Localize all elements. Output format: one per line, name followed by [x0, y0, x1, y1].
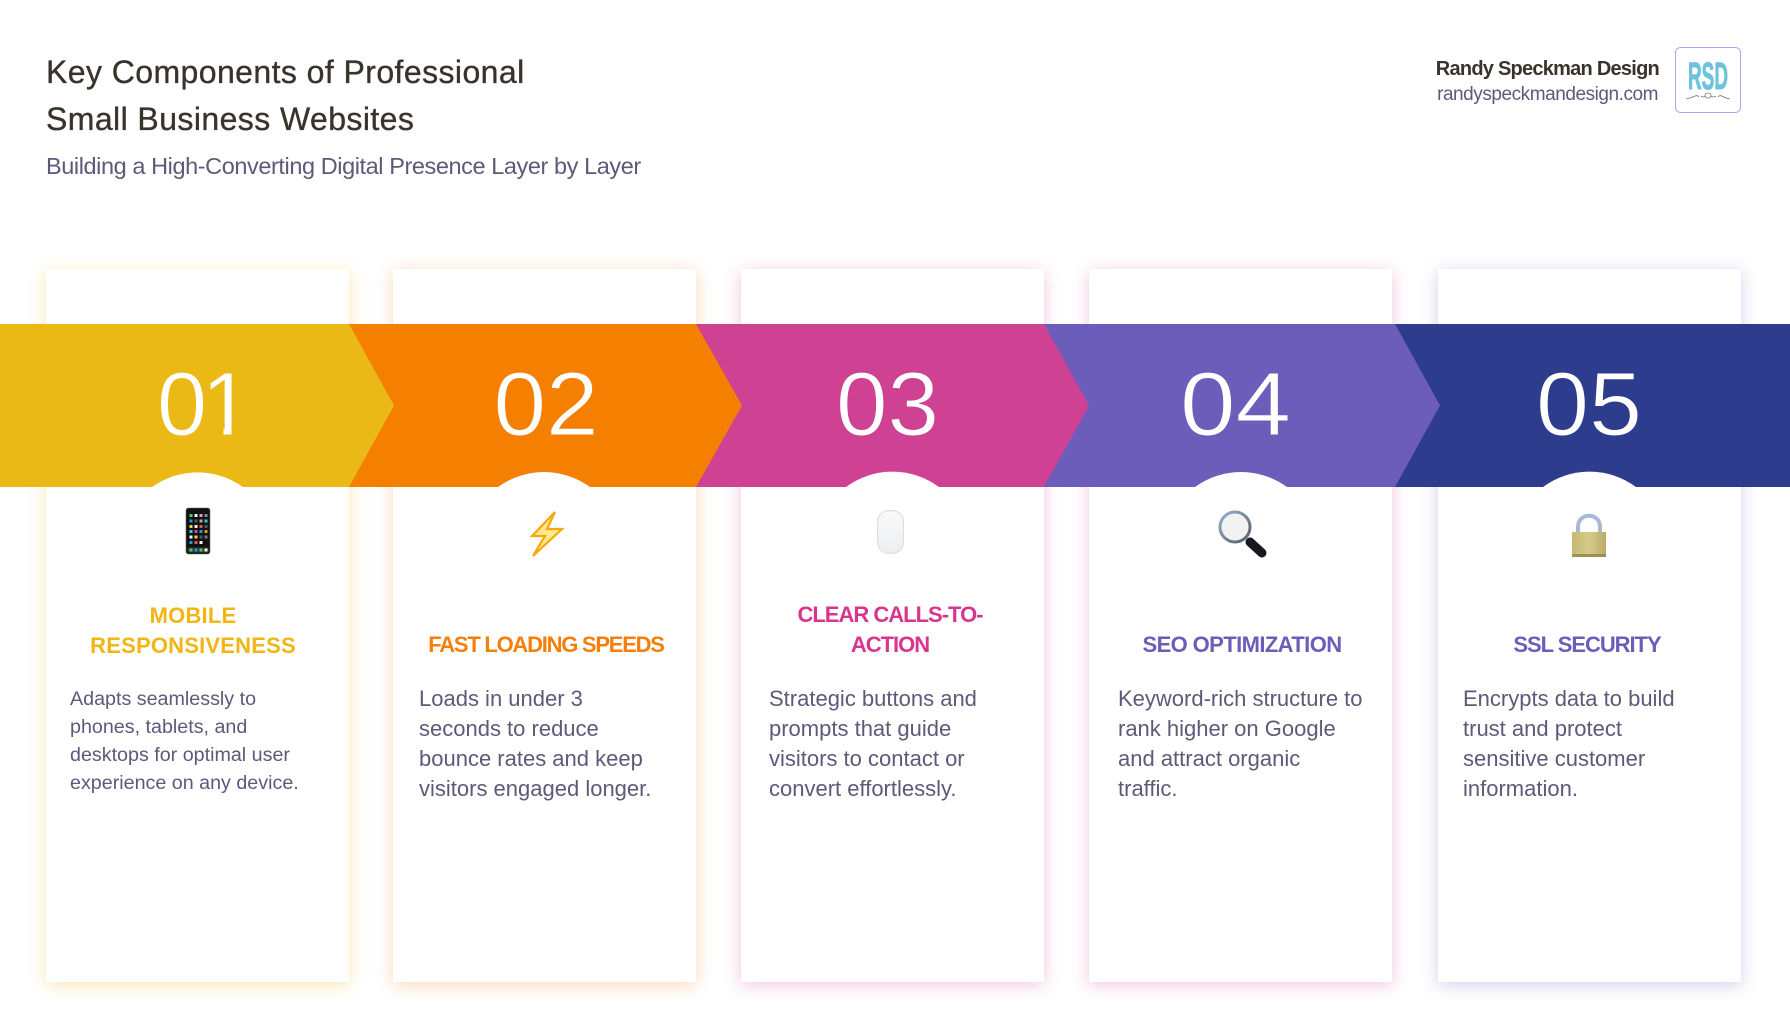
body text: [1118, 686, 1363, 801]
heading: mobile responsiveness: MOBILE: [150, 603, 236, 628]
panel: clear calls-to-action: [741, 269, 1044, 982]
body text: visitors to contact or: [769, 746, 965, 771]
heading: mobile responsiveness: RESPONSIVENESS: [90, 633, 296, 658]
body text: convert effortlessly.: [769, 776, 956, 801]
title: [46, 54, 525, 137]
panel: seo optimization: [1089, 269, 1392, 982]
body text: rank higher on Google: [1118, 716, 1336, 741]
body text: [419, 686, 651, 801]
arrow 02: 02: [494, 355, 598, 455]
body text: sensitive customer: [1463, 746, 1645, 771]
panel: fast loading speeds: [393, 269, 696, 982]
brand name: Randy Speckman Design: [1436, 58, 1659, 80]
panel: ssl security: [1438, 269, 1741, 982]
body text: prompts that guide: [769, 716, 951, 741]
icon: lightning bolt: [530, 511, 565, 557]
body text: [1463, 686, 1675, 801]
logo: [1675, 47, 1741, 113]
arrow 02: [300, 324, 742, 487]
body text: [70, 688, 299, 794]
body text: Encrypts data to build: [1463, 686, 1675, 711]
body text: bounce rates and keep: [419, 746, 643, 771]
body text: [769, 686, 977, 801]
title: Key Components of Professional: [46, 54, 525, 90]
arrow 05: [1300, 324, 1790, 487]
body text: Strategic buttons and: [769, 686, 977, 711]
heading: ssl security: SSL SECURITY: [1513, 632, 1661, 657]
body text: experience on any device.: [70, 772, 299, 794]
arrow 01: [0, 324, 394, 487]
icon: computer mouse: [877, 510, 904, 554]
body text: and attract organic: [1118, 746, 1300, 771]
arrow 05: 05: [1536, 355, 1642, 455]
heading: clear calls-to-action: [797, 602, 983, 657]
icon: mobile phone: [186, 508, 210, 554]
arrow 01: 0: [157, 355, 207, 455]
subtitle: Building a High-Converting Digital Presence Layer by Layer: [46, 153, 641, 179]
icon: padlock: [1572, 514, 1606, 557]
arrow 01: 1: [202, 355, 252, 455]
heading: fast loading speeds: FAST LOADING SPEEDS: [428, 632, 664, 657]
body text: Adapts seamlessly to: [70, 688, 256, 710]
heading: clear calls-to-action: ACTION: [851, 632, 929, 657]
title: Small Business Websites: [46, 101, 414, 137]
body text: phones, tablets, and: [70, 716, 247, 738]
body text: seconds to reduce: [419, 716, 599, 741]
heading: mobile responsiveness: [90, 603, 296, 658]
body text: Loads in under 3: [419, 686, 583, 711]
body text: Keyword-rich structure to: [1118, 686, 1363, 711]
arrow 03: [650, 324, 1089, 487]
body text: desktops for optimal user: [70, 744, 290, 766]
body text: information.: [1463, 776, 1578, 801]
arrow 03: 03: [836, 355, 939, 455]
arrow 04: [1000, 324, 1440, 487]
heading: clear calls-to-action: CLEAR CALLS-TO-: [797, 602, 983, 627]
arrow 04: 04: [1180, 355, 1291, 455]
body text: visitors engaged longer.: [419, 776, 651, 801]
body text: traffic.: [1118, 776, 1178, 801]
brand url: randyspeckmandesign.com: [1437, 84, 1658, 105]
panel: mobile responsiveness: [46, 269, 349, 982]
body text: trust and protect: [1463, 716, 1622, 741]
icon: magnifying glass: [1218, 510, 1266, 558]
heading: seo optimization: SEO OPTIMIZATION: [1142, 632, 1342, 657]
